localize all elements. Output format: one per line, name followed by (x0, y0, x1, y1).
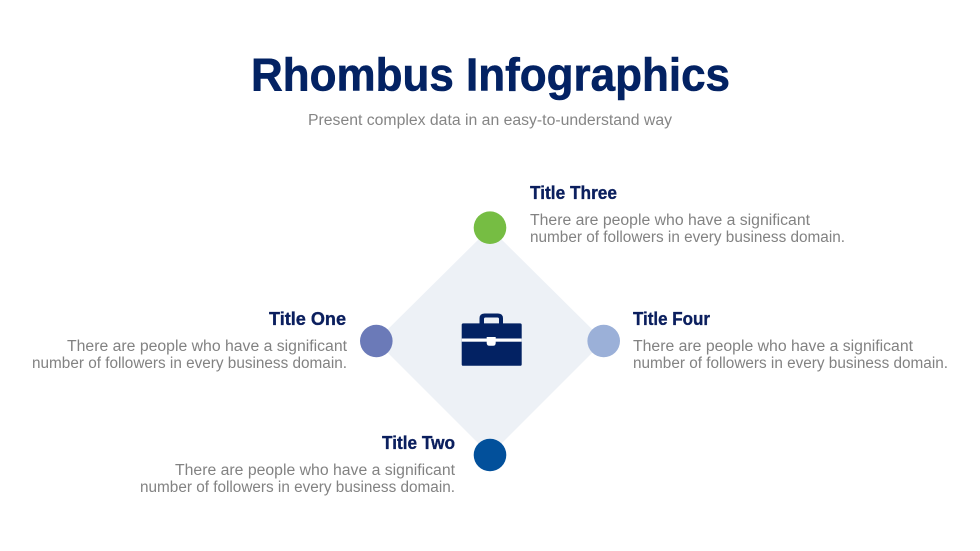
title: Rhombus Infographics (251, 48, 730, 100)
text block: title four: number of followers in every business domain. (633, 355, 948, 372)
node: title three (474, 211, 506, 244)
text block: title three: number of followers in every business domain. (530, 229, 845, 246)
icon: briefcase (462, 314, 522, 366)
text block: title one: There are people who have a significant (67, 338, 348, 355)
node: title two (474, 439, 506, 471)
text block: title four (633, 309, 948, 372)
rhombus background (376, 228, 604, 455)
text block: title four: Title Four (633, 309, 710, 329)
text block: title three (530, 183, 845, 246)
text block: title two: There are people who have a significant (175, 462, 456, 479)
text block: title two (140, 433, 456, 496)
node: title one (360, 325, 393, 357)
node: title four (587, 325, 620, 357)
text block: title three: There are people who have a significant (530, 212, 811, 229)
text block: title one (32, 309, 348, 372)
text block: title four: There are people who have a significant (633, 338, 914, 355)
text block: title two: number of followers in every business domain. (140, 479, 455, 496)
text block: title one: number of followers in every business domain. (32, 355, 347, 372)
text block: title one: Title One (269, 309, 346, 329)
text block: title two: Title Two (382, 433, 455, 453)
subtitle: Present complex data in an easy-to-understand way (308, 112, 672, 129)
text block: title three: Title Three (530, 183, 617, 203)
